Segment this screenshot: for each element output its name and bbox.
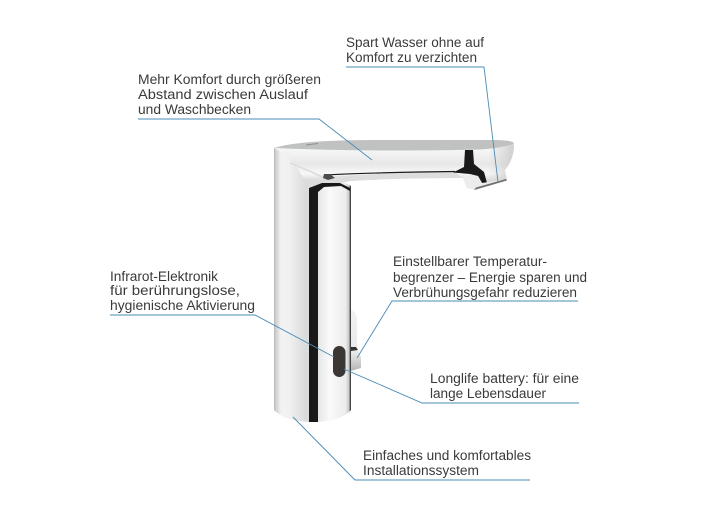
callout: temperature limiter: begrenzer – Energie sparen und xyxy=(393,270,587,285)
callout: installation system: Einfaches und komfortables xyxy=(363,448,531,463)
faucet lever xyxy=(351,310,361,371)
dark reflection on spout xyxy=(453,150,487,183)
callout: installation system xyxy=(293,417,531,480)
faucet illustration xyxy=(274,140,514,422)
aerator xyxy=(463,175,507,190)
callout: installation system: Installationssystem xyxy=(363,463,479,478)
callout: water saving: Spart Wasser ohne auf xyxy=(346,35,484,50)
callout: water saving: Komfort zu verzichten xyxy=(346,50,477,65)
spout top surface xyxy=(274,140,514,150)
faucet column xyxy=(274,148,351,422)
callout: infrared electronics: Infrarot-Elektronik xyxy=(110,269,218,284)
callout: comfort distance: Abstand zwischen Auslauf xyxy=(138,87,308,102)
callout: longlife battery xyxy=(344,369,579,403)
callout: comfort distance xyxy=(138,72,372,160)
callout: comfort distance: und Waschbecken xyxy=(138,102,251,117)
callout: temperature limiter: Verbrühungsgefahr reduzieren xyxy=(393,285,577,300)
callout: temperature limiter xyxy=(357,254,587,358)
callout: infrared electronics: für berührungslose, xyxy=(110,283,240,298)
spout tip shading xyxy=(488,144,514,185)
callout: comfort distance: Mehr Komfort durch größeren xyxy=(138,72,321,87)
spout underside highlight xyxy=(332,172,463,181)
spout crease xyxy=(290,163,324,178)
sensor window xyxy=(333,346,346,377)
dark reflection on column xyxy=(309,183,350,422)
callout: temperature limiter: Einstellbarer Temperatur- xyxy=(393,254,547,269)
callout: infrared electronics xyxy=(110,269,334,357)
callout: longlife battery: lange Lebensdauer xyxy=(430,386,547,401)
brand mark xyxy=(306,144,318,145)
callout: water saving xyxy=(346,35,498,182)
spout shell xyxy=(274,144,514,190)
callout: infrared electronics: hygienische Aktivierung xyxy=(110,298,255,313)
callout: longlife battery: Longlife battery: für eine xyxy=(430,371,579,386)
